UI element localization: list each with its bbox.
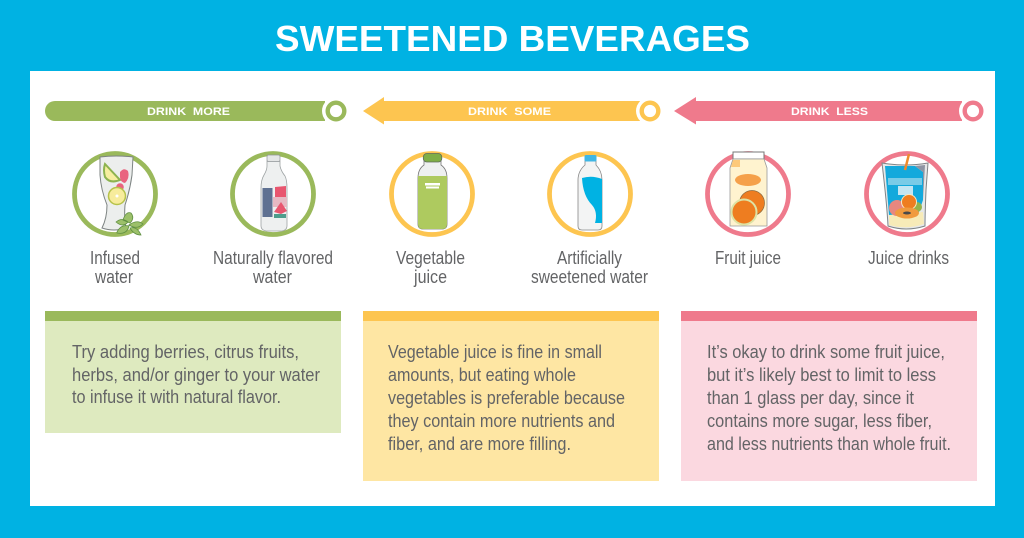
label: infused water: Infused xyxy=(90,247,140,268)
title: SWEETENED BEVERAGES xyxy=(275,18,750,59)
label: naturally flavored water: Naturally flavored xyxy=(213,247,333,268)
panel: drink some note: they contain more nutrients and xyxy=(388,411,615,431)
panel: drink less note: but it’s likely best to limit to less xyxy=(707,365,936,385)
icon: naturally flavored water xyxy=(232,154,314,234)
icon: vegetable juice xyxy=(392,154,472,234)
panel: drink more note: Try adding berries, citrus fruits, xyxy=(72,342,299,362)
panel: drink less note: than 1 glass per day, since it xyxy=(707,388,914,408)
panel: drink less note: contains more sugar, less fiber, xyxy=(707,411,932,431)
banner: drink more xyxy=(45,97,350,125)
label: infused water xyxy=(90,247,140,287)
label: artificially sweetened water: Artificially xyxy=(557,247,623,268)
label: vegetable juice: Vegetable xyxy=(396,247,465,268)
label: fruit juice: Fruit juice xyxy=(715,247,781,268)
panel: drink some note xyxy=(363,311,659,481)
white content panel xyxy=(30,71,995,506)
icon: fruit juice carton xyxy=(708,152,788,234)
panel: drink more note: to infuse it with natural flavor. xyxy=(72,387,281,407)
label: infused water: water xyxy=(94,266,133,287)
panel: drink less note: and less nutrients than whole fruit. xyxy=(707,434,951,454)
banner: drink more: DRINK MORE xyxy=(147,106,230,118)
panel: drink less note xyxy=(681,311,977,481)
panel: drink more note: herbs, and/or ginger to your water xyxy=(72,365,320,385)
label: juice drinks: Juice drinks xyxy=(868,247,949,268)
panel: drink some note: vegetables is preferable because xyxy=(388,388,625,408)
label: artificially sweetened water xyxy=(531,247,648,287)
label: naturally flavored water: water xyxy=(252,266,292,287)
banner: drink some: DRINK SOME xyxy=(468,106,551,118)
label: vegetable juice: juice xyxy=(413,266,447,287)
banner: drink some xyxy=(363,97,664,125)
panel: drink some note: Vegetable juice is fine in small xyxy=(388,342,602,362)
panel: drink less note: It’s okay to drink some fruit juice, xyxy=(707,342,945,362)
banner: drink less: DRINK LESS xyxy=(791,106,868,118)
label: vegetable juice xyxy=(396,247,465,287)
label: artificially sweetened water: sweetened water xyxy=(531,266,648,287)
panel: drink more note xyxy=(45,311,341,433)
label: naturally flavored water xyxy=(213,247,333,287)
icon: artificially sweetened water xyxy=(550,154,630,234)
panel: drink some note: amounts, but eating whole xyxy=(388,365,576,385)
icon: infused water xyxy=(74,154,156,235)
banner: drink less xyxy=(674,97,987,125)
icon: juice drink pouch xyxy=(866,154,948,234)
panel: drink some note: fiber, and are more filling. xyxy=(388,434,571,454)
